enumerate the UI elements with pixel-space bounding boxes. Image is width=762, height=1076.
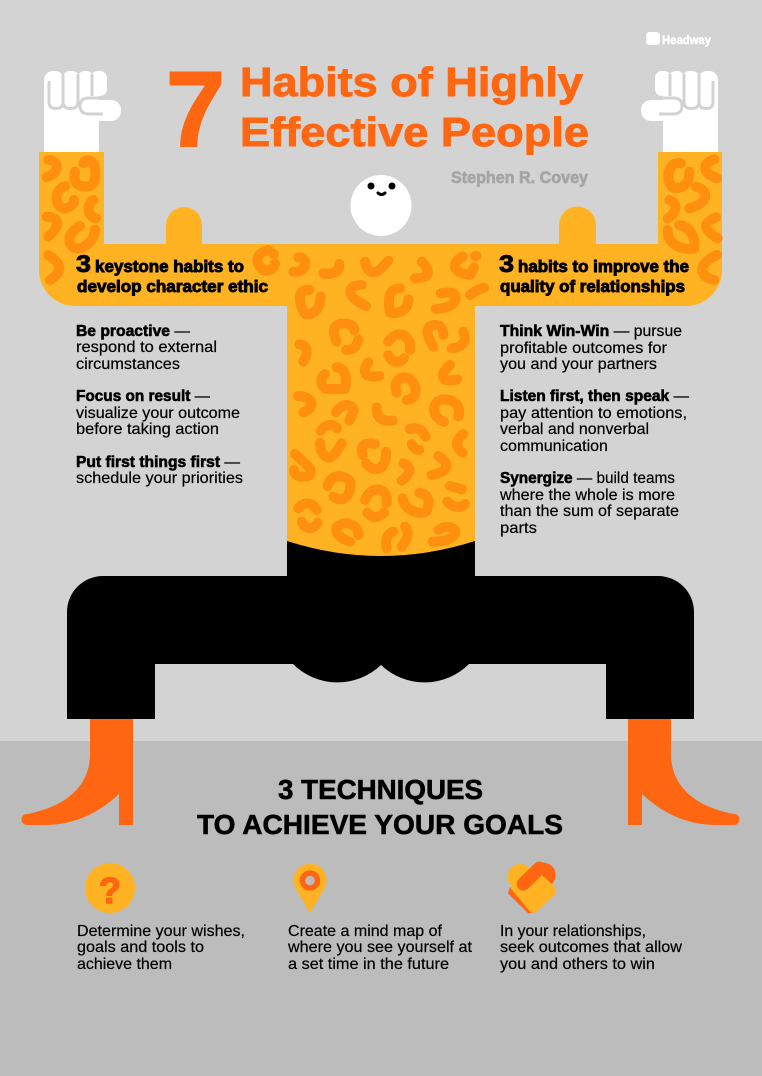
text: technique 3: In your relationships, (500, 923, 646, 940)
icon: handshake heart (507, 863, 556, 913)
heading: relationship habits: habits to improve the (518, 258, 689, 276)
heading: techniques: TO ACHIEVE YOUR GOALS (197, 809, 563, 840)
text block: keystone habits list: schedule your priorities (76, 470, 243, 487)
technique 1 (77, 863, 245, 973)
right boot (628, 719, 740, 825)
heading: keystone habits: develop character ethic (77, 278, 268, 296)
text block: relationship habits list: pay attention to emotions, (500, 405, 687, 422)
text: technique 2: Create a mind map of (288, 923, 443, 940)
sweater body (39, 152, 722, 556)
title: Effective People (240, 109, 589, 155)
title (166, 49, 589, 169)
text block: keystone habits list: respond to external (76, 339, 217, 356)
text block: keystone habits list: circumstances (76, 356, 180, 373)
icon: left fist (44, 71, 121, 152)
text: technique 3: seek outcomes that allow (500, 939, 682, 956)
black trousers (67, 535, 694, 719)
text block: keystone habits list: before taking action (76, 421, 219, 438)
text block: keystone habits list: Be proactive — (76, 323, 190, 340)
text block: relationship habits list: you and your partners (500, 356, 657, 373)
logo: Headway: Headway (662, 33, 711, 47)
text: technique 1 (77, 923, 245, 973)
author: Stephen R. Covey (451, 168, 589, 187)
heading: techniques (197, 774, 563, 840)
icon: question mark: ? (99, 870, 121, 911)
text block: relationship habits list: communication (500, 438, 608, 455)
text block: relationship habits list: Synergize — build teams (500, 470, 675, 487)
text block: keystone habits list: Focus on result — (76, 388, 210, 405)
text block: keystone habits list: visualize your outcome (76, 405, 240, 422)
orange leopard sweater (39, 152, 722, 556)
title: Habits of Highly (240, 59, 583, 105)
icon: map pin (294, 864, 326, 913)
text: technique 2 (287, 923, 473, 973)
head with face (350, 175, 412, 236)
leopard spots: torso (293, 256, 484, 548)
text block: relationship habits list: parts (500, 520, 537, 537)
technique 2 (287, 864, 473, 973)
text: technique 2: where you see yourself at (287, 939, 473, 956)
text: technique 1: goals and tools to (77, 939, 204, 956)
text: technique 2: a set time in the future (288, 956, 449, 973)
text: technique 3: you and others to win (500, 956, 655, 973)
technique 3 (500, 863, 682, 973)
icon: question mark (85, 863, 135, 913)
text block: relationship habits list: verbal and nonverbal (500, 421, 649, 438)
text block: relationship habits list: Think Win-Win — pursue (500, 323, 682, 340)
text block: relationship habits list: Listen first, then speak — (500, 388, 689, 405)
heading: keystone habits: 3 (76, 251, 91, 278)
text: technique 3 (500, 923, 682, 973)
leopard spots: right arm (668, 159, 718, 280)
heading: relationship habits (499, 251, 689, 296)
text block: relationship habits list: where the whole is more (499, 487, 675, 504)
heading: keystone habits (76, 251, 268, 296)
text: technique 1: achieve them (77, 956, 172, 973)
heading: relationship habits: 3 (499, 251, 514, 278)
heading: techniques: 3 TECHNIQUES (278, 774, 483, 805)
leopard spots: left arm (47, 160, 275, 280)
text block: keystone habits list (76, 323, 243, 487)
title: 7 (166, 49, 225, 169)
text block: relationship habits list: than the sum of separate (500, 503, 679, 520)
text: technique 1: Determine your wishes, (77, 923, 245, 940)
icon: right fist (641, 71, 718, 152)
heading: keystone habits: keystone habits to (95, 258, 244, 276)
text block: keystone habits list: Put first things first — (76, 454, 240, 471)
logo: Headway (646, 32, 711, 47)
text block: relationship habits list (499, 323, 689, 537)
left boot (22, 719, 133, 825)
text block: relationship habits list: profitable outcomes for (500, 340, 668, 357)
heading: relationship habits: quality of relationships (500, 278, 685, 296)
